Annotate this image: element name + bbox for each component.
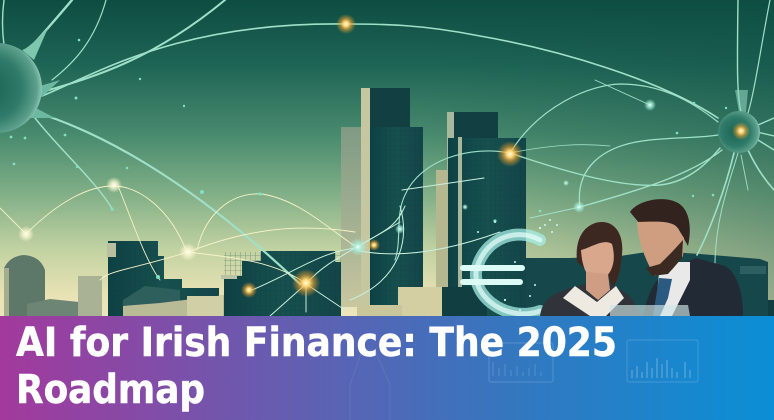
man	[630, 199, 743, 316]
neural network lines	[0, 0, 774, 316]
euro symbol made of particles	[463, 219, 558, 314]
neuron: left	[0, 28, 60, 133]
central skyscrapers	[341, 88, 526, 316]
ghosted tablet charts	[350, 340, 698, 420]
woman	[540, 222, 642, 316]
left skyline buildings	[4, 241, 341, 316]
neuron: right	[718, 90, 760, 153]
glowing nodes	[10, 14, 727, 298]
title: AI for Irish Finance: The 2025	[16, 320, 617, 366]
tablet	[610, 305, 690, 316]
sky background	[0, 0, 774, 320]
title: Roadmap	[16, 367, 205, 413]
people: business woman and man	[540, 199, 743, 316]
right low-rise buildings	[526, 251, 774, 316]
gradient title banner	[0, 316, 774, 420]
